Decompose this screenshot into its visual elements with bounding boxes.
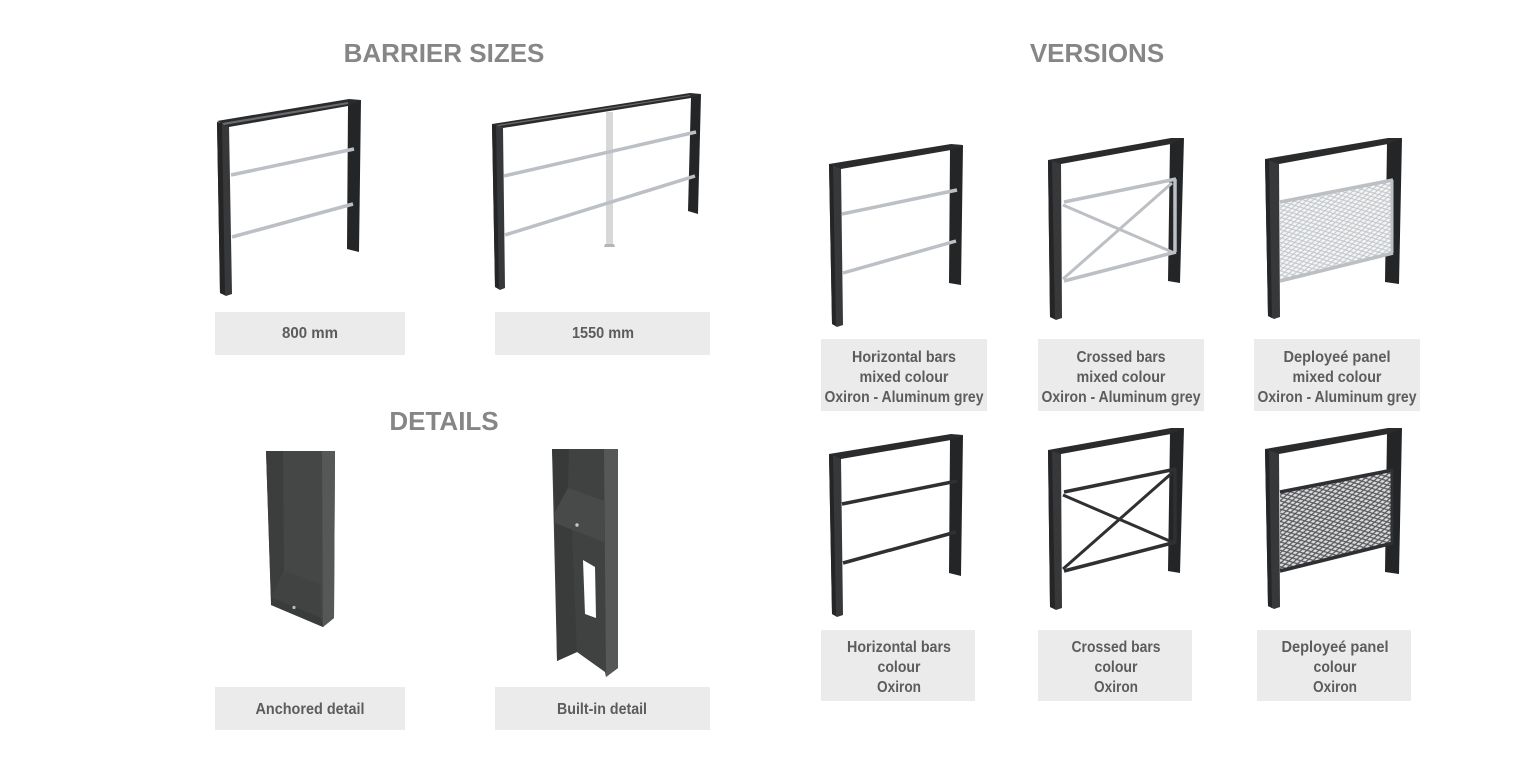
label: deployee panel oxiron: Oxiron xyxy=(1313,679,1357,696)
label: horizontal bars mixed colour: Horizontal bars xyxy=(852,349,956,366)
label: horizontal bars oxiron xyxy=(821,630,975,701)
label: anchored detail xyxy=(215,687,405,730)
label: 1550 mm: 1550 mm xyxy=(572,325,634,342)
built-in detail xyxy=(552,449,618,677)
version: crossed bars oxiron xyxy=(1048,428,1184,610)
label: 800 mm: 800 mm xyxy=(282,325,338,342)
label: deployee panel oxiron xyxy=(1257,630,1411,701)
label: 1550 mm xyxy=(495,312,710,355)
label: crossed bars oxiron: colour xyxy=(1094,659,1138,676)
label: crossed bars oxiron xyxy=(1038,630,1192,701)
label: horizontal bars oxiron: Horizontal bars xyxy=(847,639,951,656)
anchored detail xyxy=(266,451,335,627)
label: crossed bars mixed colour: Crossed bars xyxy=(1076,349,1166,366)
version: horizontal bars oxiron xyxy=(829,434,963,617)
label: built-in detail xyxy=(495,687,710,730)
label: crossed bars oxiron: Oxiron xyxy=(1094,679,1138,696)
label: crossed bars mixed colour: Oxiron - Aluminum grey xyxy=(1042,389,1201,406)
label: crossed bars oxiron: Crossed bars xyxy=(1072,639,1161,656)
label: horizontal bars oxiron: Oxiron xyxy=(877,679,921,696)
version: deployee panel mixed colour xyxy=(1265,138,1402,319)
label: horizontal bars mixed colour: Oxiron - Aluminum grey xyxy=(824,389,984,406)
label: deployee panel mixed colour: Deployeé panel xyxy=(1284,349,1390,366)
heading: details: DETAILS xyxy=(389,406,499,436)
label: deployee panel mixed colour xyxy=(1254,339,1420,411)
label: anchored detail: Anchored detail xyxy=(256,701,364,718)
label: deployee panel mixed colour: mixed colour xyxy=(1292,369,1382,386)
barrier 800 mm xyxy=(217,99,361,296)
version: deployee panel oxiron xyxy=(1265,428,1402,609)
barrier 1550 mm xyxy=(492,93,701,290)
label: 800 mm xyxy=(215,312,405,355)
label: horizontal bars mixed colour: mixed colour xyxy=(860,369,948,386)
label: built-in detail: Built-in detail xyxy=(557,701,647,718)
heading: versions: VERSIONS xyxy=(1030,38,1164,68)
label: deployee panel oxiron: Deployeé panel xyxy=(1282,639,1388,656)
label: deployee panel mixed colour: Oxiron - Aluminum grey xyxy=(1258,389,1417,406)
heading: barrier sizes: BARRIER SIZES xyxy=(344,38,544,68)
label: crossed bars mixed colour xyxy=(1038,339,1204,411)
label: horizontal bars oxiron: colour xyxy=(878,659,920,676)
label: horizontal bars mixed colour xyxy=(821,339,987,411)
version: crossed bars mixed colour xyxy=(1048,138,1184,320)
label: deployee panel oxiron: colour xyxy=(1314,659,1356,676)
version: horizontal bars mixed colour xyxy=(829,144,963,327)
label: crossed bars mixed colour: mixed colour xyxy=(1076,369,1166,386)
